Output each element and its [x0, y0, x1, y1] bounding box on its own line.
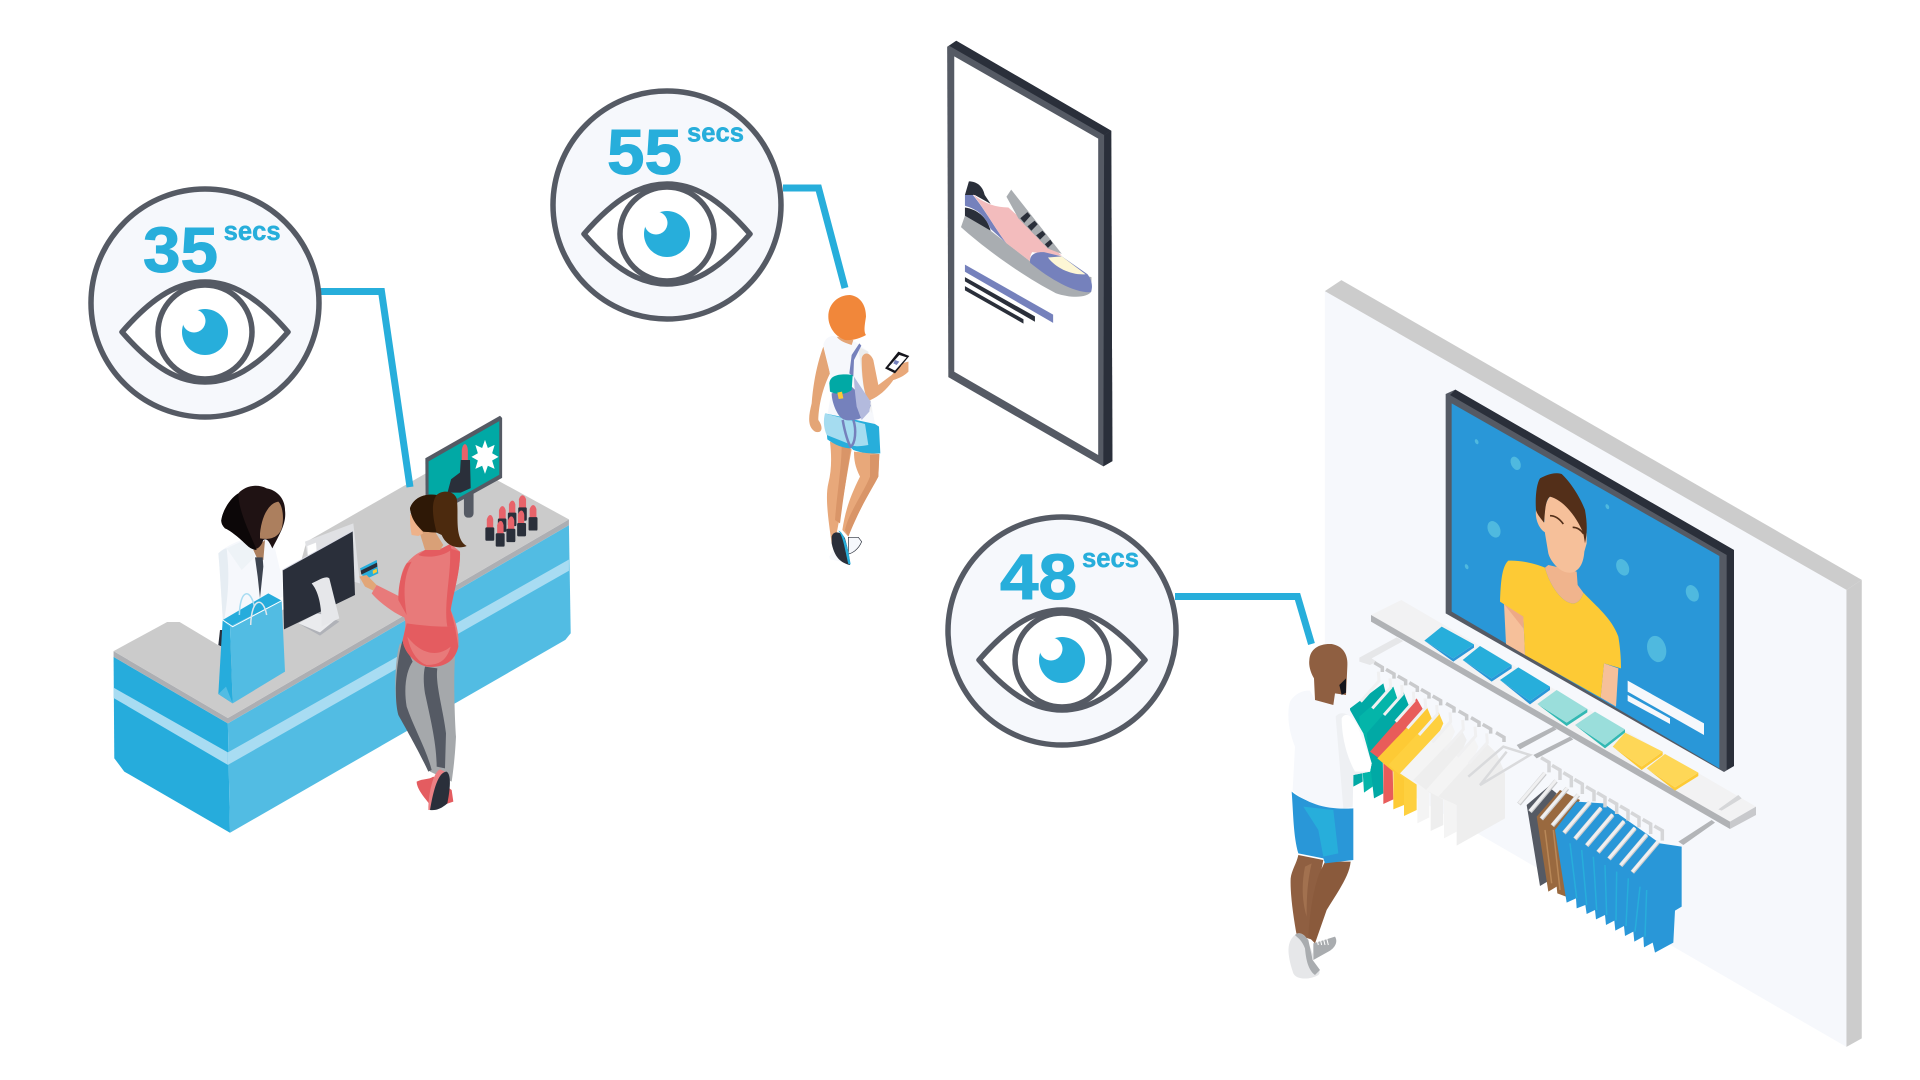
apparel, stacks and browsing man — [1288, 627, 1715, 979]
callout: 35 secs: 35 — [143, 214, 218, 286]
poster text lines — [965, 265, 1053, 324]
video screen — [1446, 390, 1734, 772]
lipsticks — [485, 495, 537, 547]
connector: wall callout — [1175, 596, 1312, 644]
poster frame — [947, 41, 1112, 466]
connector: poster callout — [783, 188, 845, 288]
presenter on screen — [1500, 473, 1621, 707]
cashier — [218, 486, 285, 647]
orange hair — [828, 295, 866, 340]
callout: 55 secs: secs — [687, 118, 744, 148]
phone — [885, 352, 909, 380]
wall — [1325, 280, 1862, 1047]
callout: 48 secs: secs — [1082, 543, 1139, 573]
right rack hangers — [1519, 758, 1662, 872]
callout: 55 secs — [553, 91, 781, 319]
callout: 48 secs — [948, 517, 1176, 745]
callout: 35 secs: secs — [224, 216, 281, 246]
counter and promo display — [114, 416, 571, 833]
shelf — [1371, 600, 1756, 829]
callout: 55 secs: 55 — [607, 116, 682, 188]
shopping bag — [218, 593, 285, 703]
register monitor — [283, 523, 360, 636]
counter — [114, 457, 571, 833]
promo display monitor — [425, 416, 502, 519]
payment card — [360, 560, 378, 580]
folded garment stacks — [1424, 627, 1698, 791]
left rack garments — [1350, 683, 1505, 846]
customer — [359, 492, 467, 810]
left rack hangers — [1361, 663, 1530, 785]
screen bubbles — [1464, 439, 1701, 664]
shopper with phone — [809, 295, 909, 565]
callout: 48 secs: 48 — [1000, 541, 1077, 613]
sneaker — [961, 181, 1092, 297]
checkout people and objects — [218, 486, 467, 810]
callout: 35 secs — [91, 189, 319, 417]
right rack garments — [1527, 787, 1682, 953]
connector: counter callout — [320, 292, 410, 487]
rack frame left — [1359, 637, 1715, 845]
browsing man — [1288, 644, 1372, 979]
backpack — [829, 343, 871, 447]
screen caption bars — [1628, 681, 1704, 735]
poster — [947, 41, 1112, 466]
